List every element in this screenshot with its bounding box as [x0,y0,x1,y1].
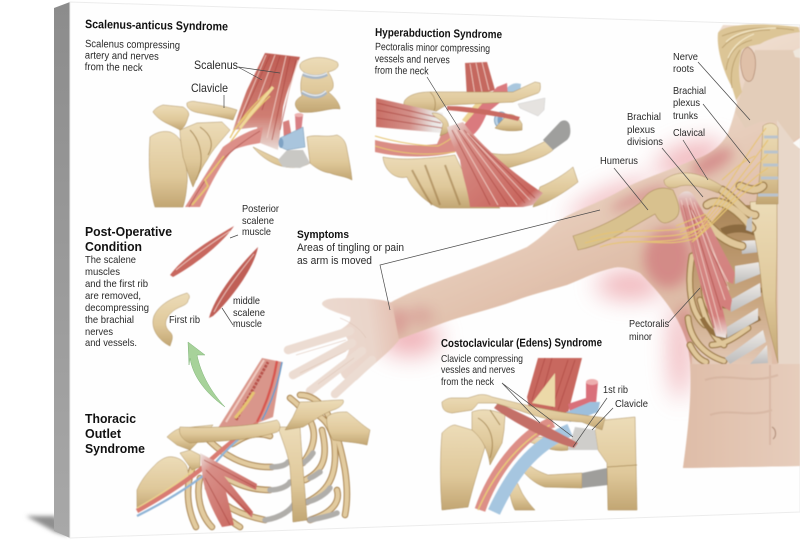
right rib cage [688,228,768,364]
arm and torso skin [388,25,800,468]
drop shadow of canvas [26,516,68,536]
neck muscle section [218,358,282,428]
text: post-operative description: decompressing [85,302,149,314]
scalene muscle [233,53,300,150]
thoracic rib cage [188,395,347,527]
pain colouring on skin [389,142,737,365]
text: post-operative description: the brachial [85,314,134,326]
text: costoclavicular description: vessles and nerves [441,364,515,376]
panel: thoracic outlet syndrome illustration [137,358,370,527]
label: brachial plexus trunks: Brachial [673,85,706,97]
scapula shading [412,165,460,205]
panel: hyperabduction syndrome illustration [375,62,578,208]
label: nerve roots: roots [673,63,694,75]
heading: post-operative condition: Post-Operative [85,224,172,239]
label: posterior scalene muscle: scalene [242,215,274,227]
label: middle scalene muscle: scalene [233,307,265,319]
first rib [153,293,189,346]
text: post-operative description: and the first rib [85,278,148,290]
acromion and collar bone [664,173,722,193]
text: costoclavicular description [441,353,523,388]
vein top [562,402,600,422]
text: costoclavicular description: from the neck [441,376,495,388]
label: posterior scalene muscle: muscle [242,226,271,238]
neck muscles [527,358,582,414]
panel: scalenus-anticus syndrome illustration [149,53,352,207]
heading: thoracic outlet syndrome: Thoracic [85,411,136,426]
heading: thoracic outlet syndrome: Syndrome [85,441,145,456]
abdomen [683,364,800,468]
coracoid [180,450,200,470]
text: hyperabduction description: from the neck [375,64,429,77]
label: posterior scalene muscle: Posterior [242,203,279,215]
pectoralis minor [678,191,735,338]
jaw gap [793,138,800,149]
subclavian vessels [278,113,305,150]
chest cavity [689,205,772,364]
scapula [180,122,230,187]
scapula right [327,412,370,445]
text: scalenus description [85,38,180,75]
humerus [137,457,190,510]
panel: costoclavicular syndrome illustration [440,358,637,512]
text: post-operative description: muscles [85,266,120,278]
middle scalene muscle [209,247,258,318]
sternum [750,200,778,363]
scapula [472,410,505,465]
clavicle bone [404,82,540,114]
hair strands [722,28,794,88]
subclavian artery [185,127,263,207]
abdomen muscle shading [705,365,778,445]
clavicle bone [179,420,280,443]
right clavicle and acromion [285,400,343,430]
label: clavical: Clavical [673,127,705,139]
text: scalenus description: Scalenus compressing [85,38,180,52]
label: brachial plexus divisions: Brachial [627,111,661,123]
hand [288,298,399,394]
label: nerve roots [673,51,698,75]
rib 2 cartilage [582,468,608,488]
leader lines [222,62,750,447]
callout: symptoms: Symptoms [297,229,349,241]
heading: post-operative condition: Condition [85,239,142,254]
label: clavicle lower: Clavicle [615,398,648,410]
humerus [440,425,485,510]
artery [458,83,508,137]
text: costoclavicular description: Clavicle compressing [441,353,523,365]
figure: man with raised arm [288,24,800,468]
label: 1st rib: 1st rib [603,384,628,396]
label: pectoralis minor: minor [629,331,652,343]
scapula shading [190,127,211,180]
sternum bone [278,427,307,522]
neck and face [735,50,800,142]
heading: post-operative condition [85,224,172,254]
upper ribs [700,186,763,246]
text: scalenus description: artery and nerves [85,49,159,63]
label: middle scalene muscle: middle [233,295,260,307]
canvas side edge [54,2,70,538]
arm vessels [375,130,461,156]
label: brachial plexus trunks [673,85,706,122]
label: scalenus: Scalenus [194,58,238,72]
label: brachial plexus trunks: plexus [673,97,700,109]
vein blue [494,83,521,128]
label: middle scalene muscle: muscle [233,318,262,330]
vertebrae [295,58,340,112]
arm vessels [137,423,265,516]
text: scalenus description: from the neck [85,61,143,74]
text: post-operative description: are removed, [85,290,141,302]
coracoid joint line [430,92,435,113]
cartilage [278,150,310,168]
rib 1 [530,437,568,451]
label: brachial plexus divisions: plexus [627,124,655,136]
artery and vein crossing [478,422,570,512]
heading: thoracic outlet syndrome [85,411,145,456]
label: posterior scalene muscle [242,203,279,238]
label: brachial plexus divisions: divisions [627,136,663,148]
rib 1 cartilage [568,427,598,450]
nerves [228,87,273,146]
label: clavicle: Clavicle [191,81,228,95]
humerus [149,132,187,207]
pale skin right of sternum [777,120,800,364]
hair highlight [726,28,776,58]
scapula mass [383,155,500,208]
rib 2 [519,460,582,488]
text: post-operative description [85,254,149,349]
text: post-operative description: and vessels. [85,337,137,349]
rib 3 fragment [508,478,535,510]
navel [772,427,776,439]
humerus bone [573,188,679,250]
subclavius [447,106,520,121]
clavicle bone [187,101,237,120]
costal cartilage [265,453,337,520]
panel: post-operative muscle and rib pieces [153,226,258,346]
label: brachial plexus trunks: trunks [673,110,698,122]
sternum [595,417,637,510]
hair [718,24,800,100]
pale strip under lower ribs [692,340,730,364]
rib head [495,114,522,131]
tendon fan [518,98,545,116]
costal cartilage [725,240,768,364]
shoulder bone [167,425,213,450]
pectoralis minor muscle [447,122,543,207]
label: brachial plexus divisions [627,111,663,148]
chest muscle left [376,98,443,133]
subclavius muscle [494,403,578,448]
neck muscle [465,62,495,98]
heading: scalenus-anticus syndrome: Scalenus-anticus Syndrome [85,17,228,34]
label: humerus: Humerus [600,155,638,167]
text: post-operative description: The scalene [85,254,136,266]
text: hyperabduction description: vessels and nerves [375,53,450,66]
rib lower [533,167,578,207]
red pain glow behind the body [380,134,729,400]
ear [741,47,756,81]
heading: hyperabduction syndrome: Hyperabduction Syndrome [375,27,502,41]
first rib and sternum [253,135,352,180]
callout: symptoms: as arm is moved [297,255,372,267]
spine with discs [756,123,778,204]
callout: symptoms [297,229,404,267]
callout: symptoms: Areas of tingling or pain [297,242,404,254]
rib cartilage [543,120,570,150]
label: first rib: First rib [169,314,200,326]
heading: thoracic outlet syndrome: Outlet [85,426,122,441]
label: middle scalene muscle [233,295,265,330]
eye [793,48,800,58]
clavicle bone [442,395,605,430]
text: post-operative description: nerves [85,326,113,338]
text: hyperabduction description [375,41,490,79]
arrow: green upward arrow [188,342,225,407]
scapula shading [478,410,500,458]
label: nerve roots: Nerve [673,51,698,63]
heading: costoclavicular syndrome: Costoclavicular (Edens) Syndrome [441,337,602,350]
coracoid hook [432,113,449,136]
brachial plexus nerves [585,128,768,247]
sternum joint line [607,465,637,467]
label: pectoralis minor: Pectoralis [629,318,669,330]
rib middle [490,137,553,172]
posterior scalene muscle [170,226,234,277]
label: pectoralis minor [629,318,669,343]
nerves yellow [462,93,488,125]
text: hyperabduction description: Pectoralis minor compressing [375,41,490,55]
acromion [153,105,189,130]
pectoralis minor muscle [200,453,257,527]
subclavian artery top [568,379,598,412]
